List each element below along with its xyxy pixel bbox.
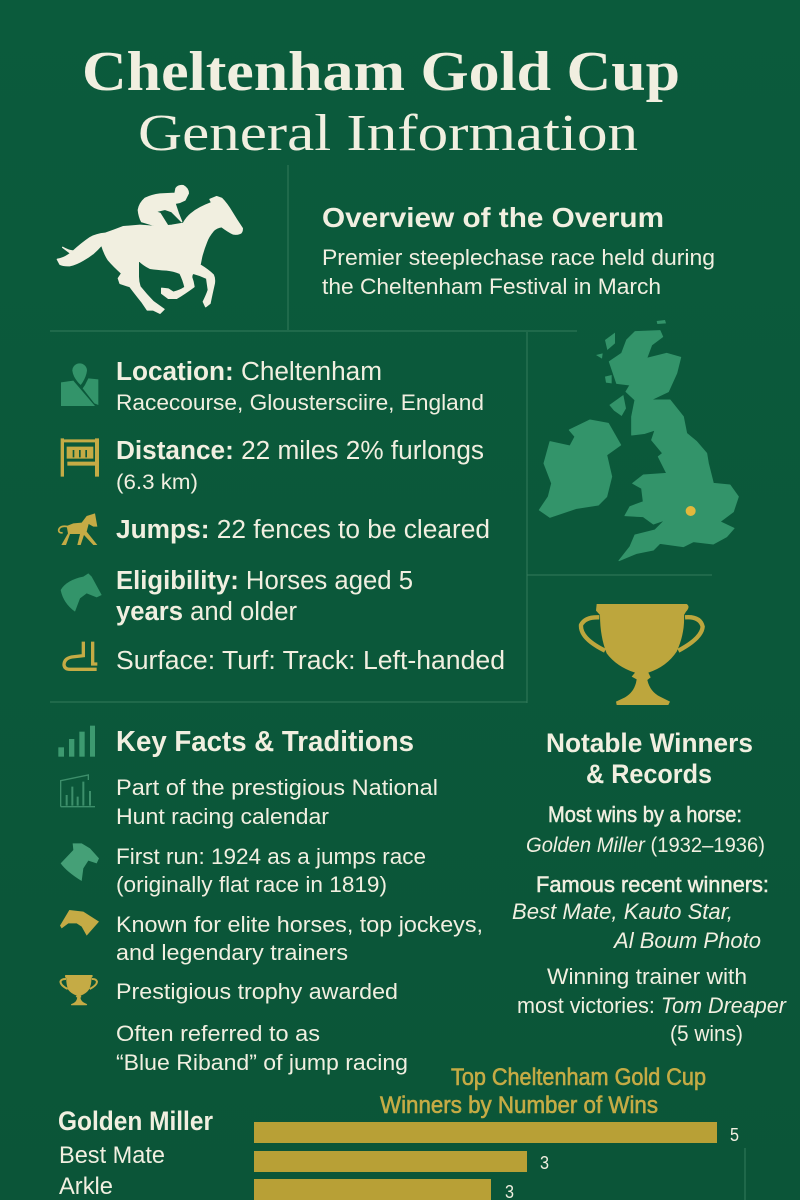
map: Great Britain and Ireland [539,320,738,561]
overview text: Overview of the Overum [322,202,664,233]
distance text: Distance: 22 miles 2% furlongs [116,437,484,465]
location text [116,358,484,415]
title: General Information [138,105,638,162]
icon: location [61,363,98,406]
bar: Best Mate: 3 [540,1153,549,1173]
icon: small trophy [60,975,97,1005]
record: recent winners [512,872,769,953]
icon: horse head green [61,843,99,881]
bar: Golden Miller [58,1106,739,1145]
bar: Golden Miller: 5 [730,1125,739,1145]
heading [546,728,753,789]
fact: trophy: Prestigious trophy awarded [116,979,398,1004]
fact: blue riband: “Blue Riband” of jump racing [116,1050,408,1075]
bar: Arkle: Arkle [59,1173,113,1200]
record: most wins: Golden Miller (1932–1936) [526,833,765,857]
eligibility text: years and older [116,598,298,626]
bar: Arkle [59,1173,514,1200]
fact: national hunt: Hunt racing calendar [116,804,330,829]
icon: horse head [61,573,102,612]
distance text: (6.3 km) [116,471,198,494]
record: winning trainer: most victories: Tom Dreaper [517,993,788,1018]
jumps text: Jumps: 22 fences to be cleared [116,516,490,544]
record: winning trainer [517,964,788,1046]
panel: key facts and traditions [58,726,483,1075]
title [82,41,680,162]
record: recent winners: Best Mate, Kauto Star, [512,899,733,924]
icon: horse and jockey silhouette [57,186,242,313]
record: recent winners: Al Boum Photo [612,928,761,953]
title: Cheltenham Gold Cup [82,41,680,103]
map marker: Cheltenham [686,506,696,516]
fact: blue riband [116,1021,408,1075]
chart title: Winners by Number of Wins [380,1092,658,1119]
heading: Key Facts & Traditions [116,726,414,758]
panel: race details [59,358,505,675]
surface text: Surface: Turf: Track: Left-handed [116,647,505,675]
fact: first run: (originally flat race in 1819) [116,872,387,897]
fact: national hunt: Part of the prestigious National [116,775,438,800]
icon: calendar chart [61,775,95,807]
overview text: Premier steeplechase race held during [322,245,715,270]
eligibility text: Eligibility: Horses aged 5 [116,567,413,595]
icon: surface [64,642,97,669]
record: most wins: Most wins by a horse: [548,802,742,827]
fact: elite horses [116,912,483,965]
record: recent winners: Famous recent winners: [536,872,769,897]
chart title: Top Cheltenham Gold Cup [451,1064,706,1091]
icon: horse head gold [60,910,99,936]
chart title [380,1064,706,1119]
fact: national hunt [116,775,438,829]
distance text [116,437,484,494]
fact: elite horses: and legendary trainers [116,940,348,965]
eligibility text [116,567,413,626]
heading: Notable Winners [546,728,753,758]
panel: notable winners and records [512,728,788,1046]
icon: jumping horse [59,513,97,545]
overview text [322,202,715,299]
overview text: the Cheltenham Festival in March [322,274,661,299]
bar: Best Mate: Best Mate [59,1142,165,1169]
location text: Location: Cheltenham [116,358,382,386]
heading: & Records [586,759,712,789]
fact: first run [116,844,426,897]
record: most wins [526,802,765,857]
bar: Golden Miller: Golden Miller [58,1106,213,1136]
icon: distance [61,438,99,477]
bar: Best Mate [59,1142,549,1173]
record: winning trainer: (5 wins) [670,1021,743,1046]
fact: blue riband: Often referred to as [116,1021,320,1046]
icon: large trophy [581,604,703,705]
location text: Racecourse, Gloustersciire, England [116,390,484,415]
bar chart: top winners [58,1064,739,1200]
record: winning trainer: Winning trainer with [547,964,747,989]
icon: bar chart [58,726,95,757]
fact: elite horses: Known for elite horses, top jockeys, [116,912,483,937]
fact: first run: First run: 1924 as a jumps race [116,844,426,869]
